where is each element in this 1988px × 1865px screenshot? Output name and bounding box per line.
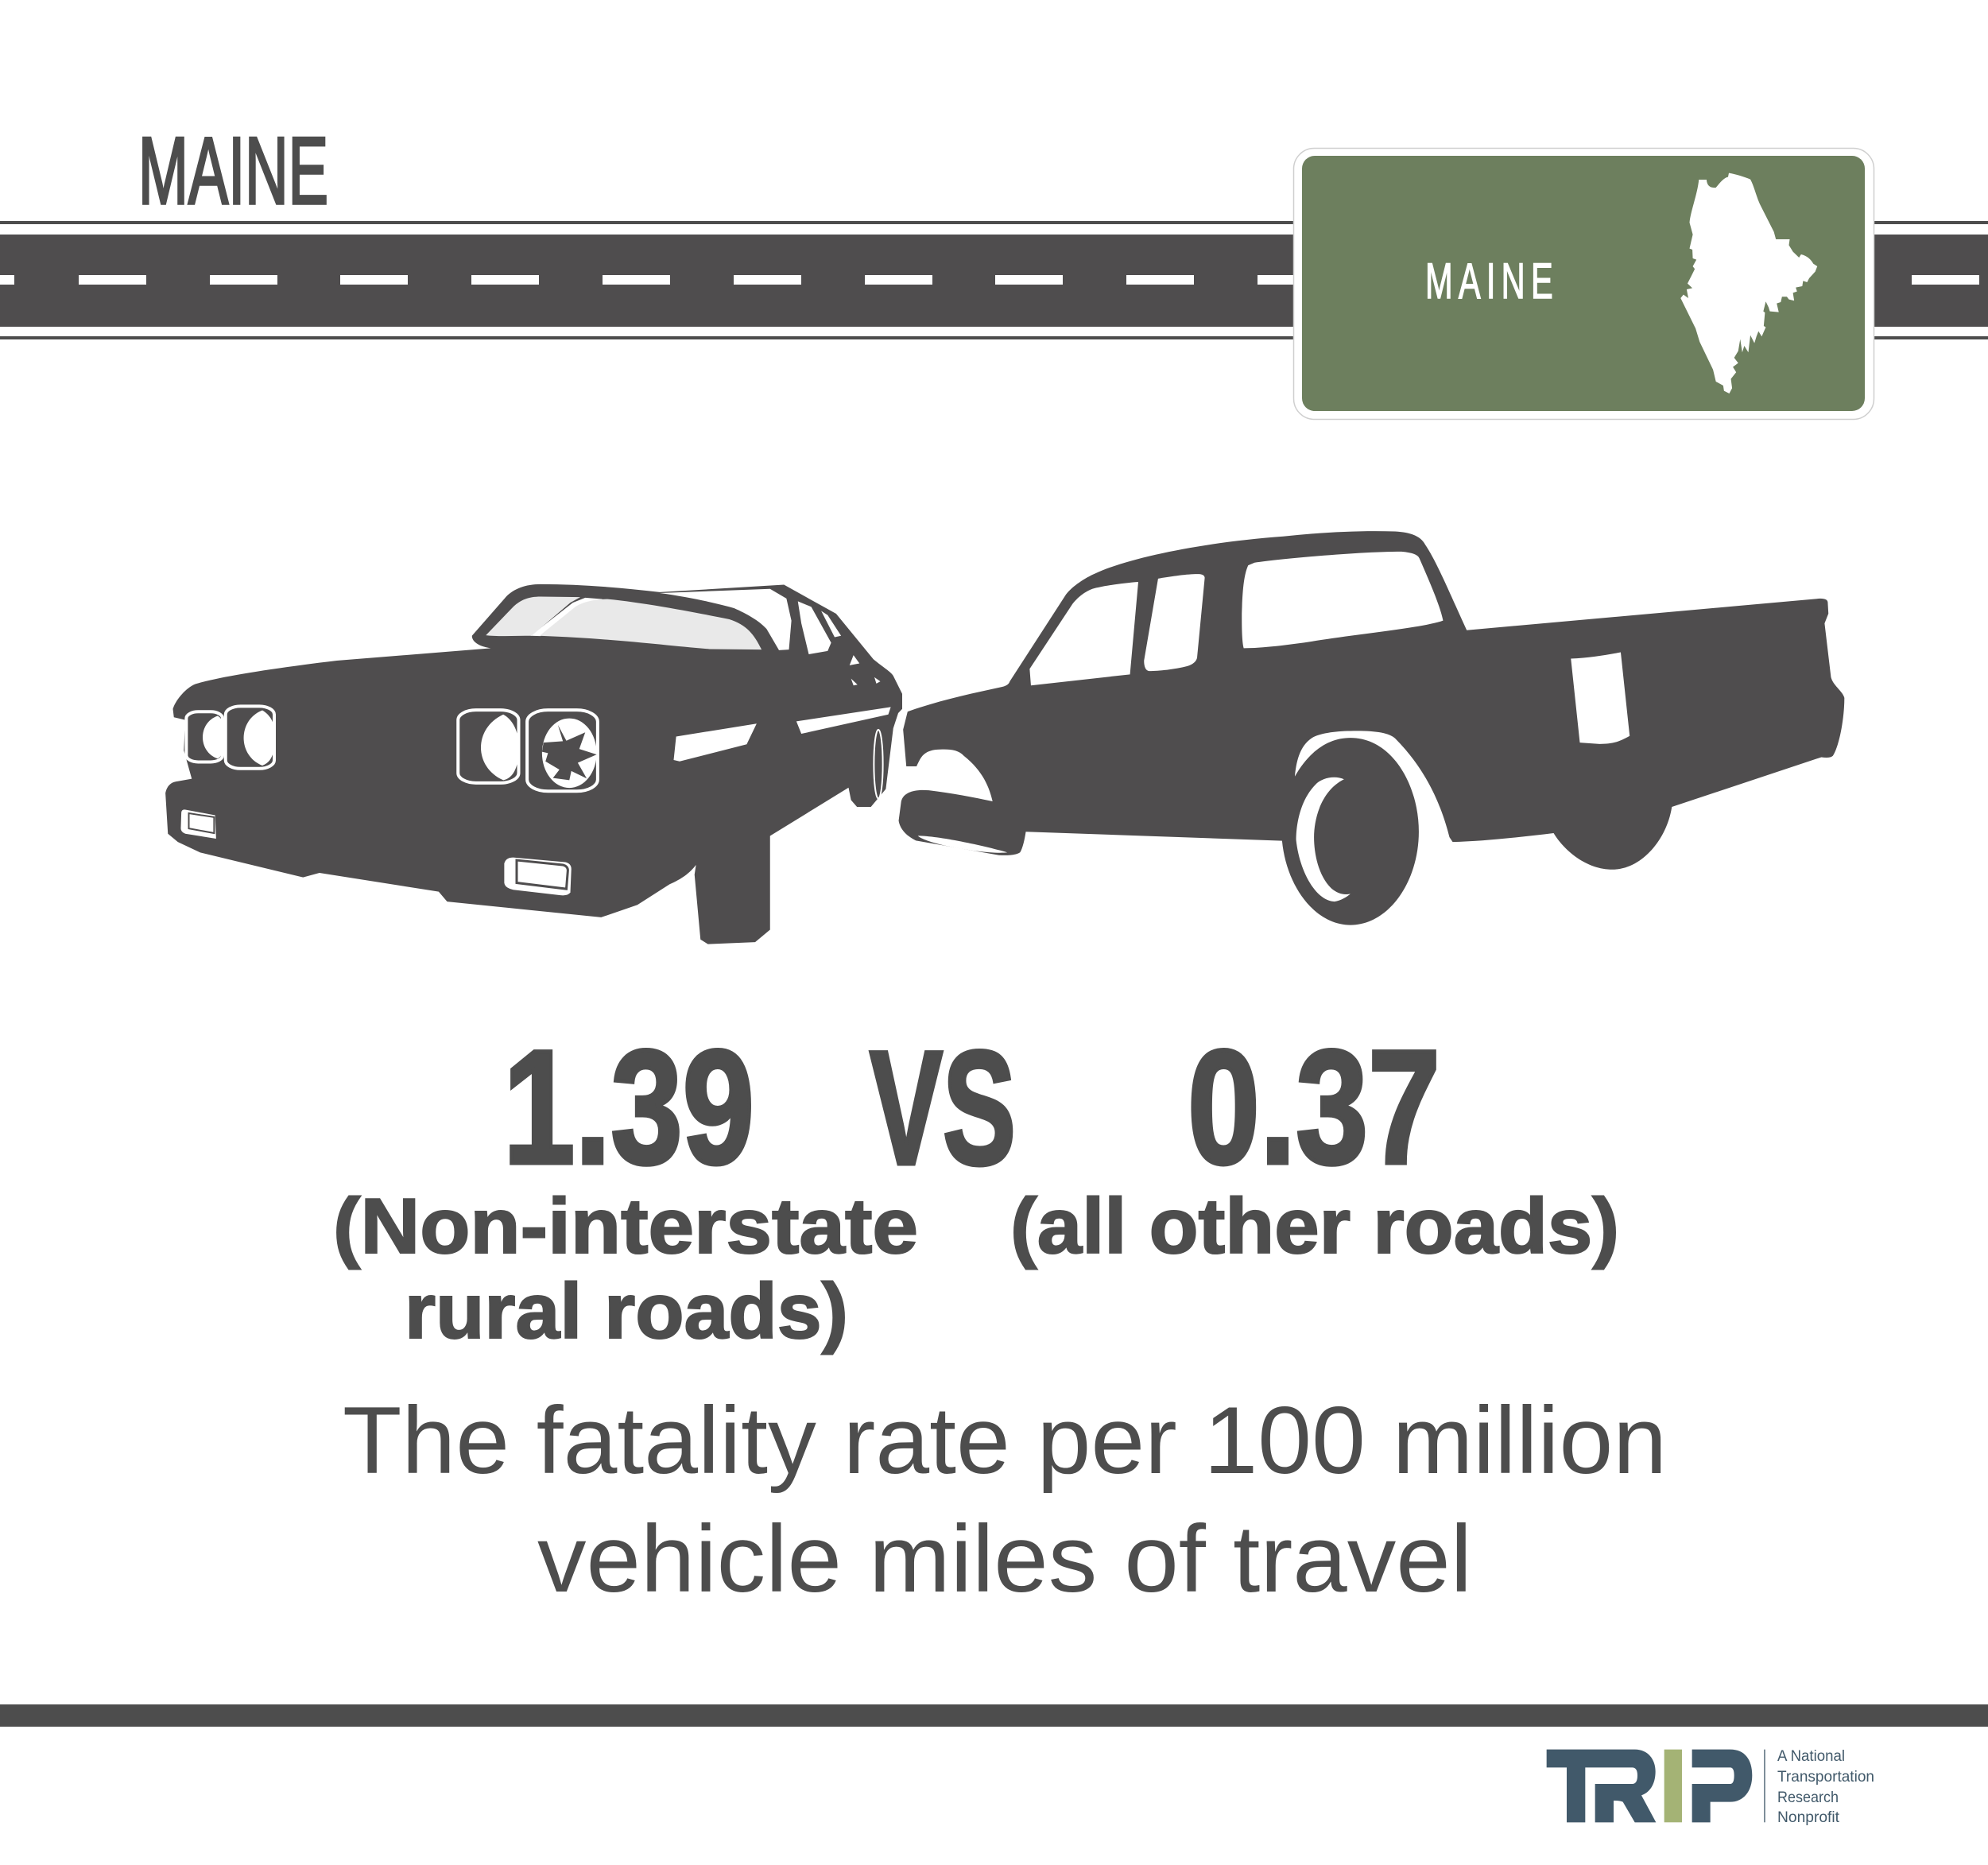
highway sign [1294, 148, 1874, 420]
headlights left [186, 706, 598, 791]
truck windows [918, 552, 1630, 901]
figure: 1.39: 1.39 [503, 1017, 754, 1198]
description [343, 1387, 1667, 1612]
icon: Maine state outline [1680, 173, 1817, 394]
windshield [486, 596, 761, 649]
label: non-interstate rural roads [333, 1182, 918, 1355]
fog lamps [180, 809, 572, 895]
side windows [660, 589, 881, 685]
sign label: MAINE [1425, 254, 1559, 309]
description: The fatality rate per 100 million [343, 1387, 1667, 1494]
VS: VS [870, 1018, 1016, 1199]
title: MAINE [138, 118, 328, 224]
logo tagline: Transportation [1777, 1768, 1874, 1786]
logo tagline: Nonprofit [1777, 1809, 1840, 1826]
logo tagline [1777, 1747, 1874, 1826]
bottom bar [0, 1704, 1988, 1727]
label: all other roads: (all other roads) [1010, 1182, 1619, 1270]
label: non-interstate rural roads: (Non-interstate [333, 1182, 918, 1270]
figure: 0.37: 0.37 [1188, 1017, 1440, 1198]
label: non-interstate rural roads: rural roads) [405, 1267, 848, 1355]
logo tagline: Research [1777, 1789, 1839, 1806]
pickup truck silhouette [899, 531, 1844, 925]
road [0, 221, 1988, 339]
TRIP logo [1547, 1747, 1874, 1826]
logo tagline: A National [1777, 1747, 1845, 1765]
star crack in headlight [542, 725, 597, 780]
car silhouette [165, 584, 902, 944]
side trim [674, 707, 891, 762]
description: vehicle miles of travel [537, 1506, 1472, 1612]
